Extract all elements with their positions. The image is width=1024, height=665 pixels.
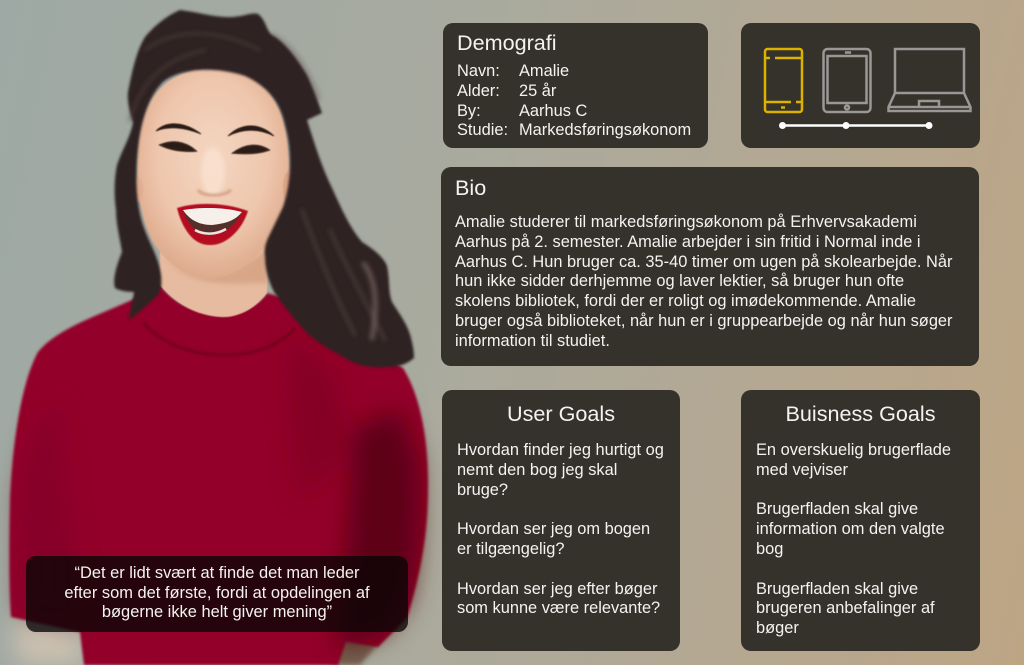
ears	[133, 178, 143, 202]
panel: business goals	[741, 390, 980, 651]
mouth	[177, 204, 248, 245]
user goals list: Hvordan finder jeg hurtigt og	[457, 441, 664, 459]
demographic labels: Alder:	[457, 82, 500, 100]
heading: business goals: Buisness Goals	[785, 401, 936, 426]
hair wisps	[270, 35, 318, 100]
face	[137, 68, 289, 278]
icon: laptop	[888, 49, 970, 111]
business goals list: bøger	[756, 619, 799, 637]
user goals list: Hvordan ser jeg om bogen	[457, 520, 650, 538]
panel: demografi	[443, 23, 708, 148]
timeline	[779, 122, 932, 129]
user goals list	[457, 441, 664, 617]
business goals list: brugeren anbefalinger af	[756, 599, 935, 617]
demographic labels	[457, 62, 508, 139]
eyebrows	[156, 124, 274, 136]
bio text: Aarhus C. Hun bruger ca. 35-40 timer om ugen på skolearbejde. Når	[455, 253, 952, 271]
quote box	[26, 556, 408, 632]
collar shadow	[143, 322, 295, 355]
demographic labels: Navn:	[457, 62, 500, 80]
quote text	[64, 564, 370, 621]
icon: tablet	[824, 49, 870, 112]
panel: bio	[441, 167, 979, 366]
heading: bio: Bio	[455, 175, 486, 200]
demographic values: Markedsføringsøkonom	[519, 121, 691, 139]
business goals list: En overskuelig brugerflade	[756, 441, 951, 459]
business goals list: Brugerfladen skal give	[756, 500, 918, 518]
bio text: information til studiet.	[455, 332, 610, 350]
demographic values: Aarhus C	[519, 102, 587, 120]
eyes	[160, 142, 269, 154]
user goals list: nemt den bog jeg skal	[457, 461, 617, 479]
quote text: “Det er lidt svært at finde det man leder	[74, 564, 360, 582]
neck shadow	[162, 250, 268, 284]
business goals list: Brugerfladen skal give	[756, 580, 918, 598]
demographic values: Amalie	[519, 62, 569, 80]
business goals list: information om den valgte	[756, 520, 945, 538]
user goals list: bruge?	[457, 481, 508, 499]
bio text: Aarhus på 2. semester. Amalie arbejder i sin fritid i Normal inde i	[455, 233, 921, 251]
user goals list: er tilgængelig?	[457, 540, 565, 558]
bio text: bruger også biblioteket, når hun er i gruppearbejde og når hun søger	[455, 312, 953, 330]
right forearm	[330, 625, 395, 665]
demographic labels: By:	[457, 102, 481, 120]
business goals list	[756, 441, 951, 637]
business goals list: med vejviser	[756, 461, 848, 479]
user goals list: som kunne være relevante?	[457, 599, 660, 617]
user goals list: Hvordan ser jeg efter bøger	[457, 580, 657, 598]
bio text: skolens bibliotek, fordi der er roligt og imødekommende. Amalie	[455, 292, 916, 310]
icon: phone	[765, 49, 802, 112]
nose	[201, 148, 225, 196]
sweater	[9, 285, 428, 665]
panel: user goals	[442, 390, 680, 651]
bio text: hun ikke sidder derhjemme og laver lektier, så bruger hun ofte	[455, 272, 904, 290]
bio text: Amalie studerer til markedsføringsøkonom på Erhvervsakademi	[455, 213, 917, 231]
hair	[114, 10, 414, 367]
demographic values: 25 år	[519, 82, 556, 100]
business goals list: bog	[756, 540, 783, 558]
panel: devices	[741, 23, 980, 148]
heading: demografi: Demografi	[457, 30, 557, 55]
hair strands	[130, 34, 385, 340]
demographic labels: Studie:	[457, 121, 508, 139]
quote text: efter som det første, fordi at opdelingen af	[64, 584, 370, 602]
quote text: bøgerne ikke helt giver mening”	[102, 603, 332, 621]
neck	[160, 240, 268, 317]
bio text	[455, 213, 953, 350]
sweater shading	[18, 340, 420, 650]
demographic values	[519, 62, 691, 139]
left forearm	[12, 615, 86, 665]
heading: user goals: User Goals	[507, 401, 615, 426]
